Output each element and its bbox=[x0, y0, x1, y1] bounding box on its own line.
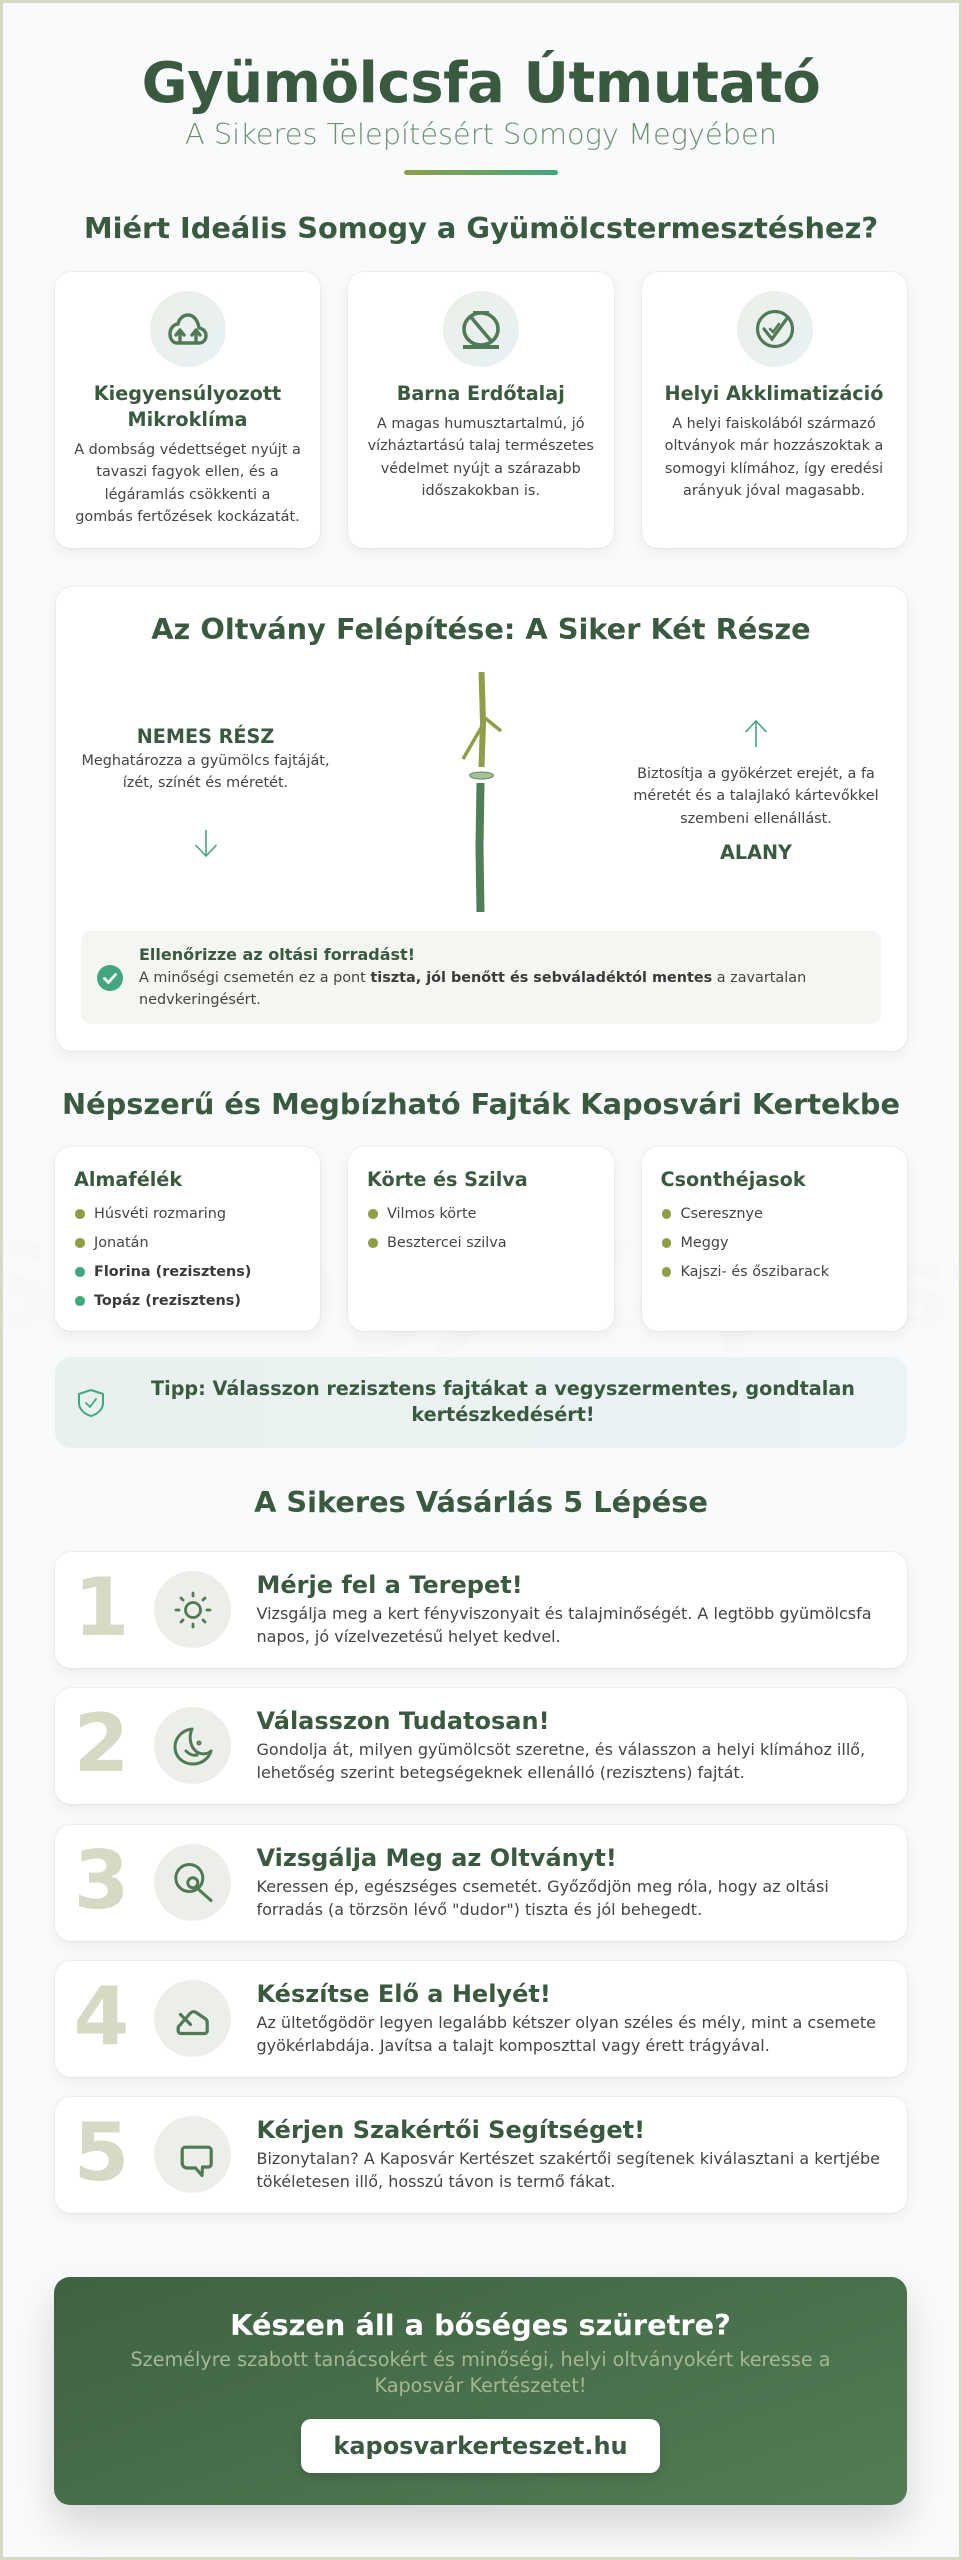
step text: Az ültetőgödör legyen legalább kétszer olyan széles és mély, mint a csemete bbox=[256, 2013, 876, 2032]
step text bbox=[256, 1604, 872, 1646]
panel: microclimate bbox=[55, 272, 320, 548]
panel: pears and plums bbox=[348, 1147, 614, 1331]
card text: oltványok már hozzászoktak a bbox=[665, 438, 883, 454]
step number: 3 bbox=[74, 1834, 129, 1927]
card text: A magas humusztartalmú, jó bbox=[377, 416, 585, 432]
step number: 1 bbox=[74, 1561, 129, 1654]
card text: tavaszi fagyok ellen, és a bbox=[96, 464, 279, 480]
list item: Húsvéti rozmaring bbox=[94, 1206, 226, 1222]
step title: Vizsgálja Meg az Oltványt! bbox=[256, 1844, 617, 1872]
step title: Válasszon Tudatosan! bbox=[256, 1707, 550, 1735]
panel: apples bbox=[55, 1147, 320, 1331]
card text: A helyi faiskolából származó bbox=[672, 416, 876, 432]
step number: 5 bbox=[74, 2106, 129, 2199]
arrow: up bbox=[745, 720, 767, 747]
card heading: Mikroklíma bbox=[128, 408, 247, 431]
list item: Topáz (rezisztens) bbox=[94, 1293, 241, 1309]
card heading bbox=[94, 382, 281, 431]
card text bbox=[368, 416, 594, 499]
cta button bbox=[301, 2419, 660, 2473]
callout text bbox=[139, 970, 806, 1008]
card text: somogyi klímához, így eredési bbox=[665, 461, 883, 477]
list item: Kajszi- és őszibarack bbox=[680, 1264, 829, 1280]
callout: check graft bbox=[81, 931, 881, 1024]
panel: graft anatomy bbox=[56, 587, 906, 1051]
arrow: down bbox=[195, 830, 217, 857]
panel heading: Az Oltvány Felépítése: A Siker Két Része bbox=[151, 612, 811, 646]
card heading: Helyi Akklimatizáció bbox=[665, 382, 883, 405]
step title: Készítse Elő a Helyét! bbox=[256, 1980, 551, 2008]
cta heading: Készen áll a bőséges szüretre? bbox=[230, 2308, 731, 2342]
step text bbox=[256, 2013, 876, 2055]
icon: planting hole bbox=[154, 1980, 231, 2057]
card heading: Kiegyensúlyozott bbox=[94, 382, 281, 405]
card text: időszakokban is. bbox=[422, 483, 540, 499]
icon: double check ring bbox=[736, 291, 812, 367]
step 4 bbox=[55, 1961, 907, 2077]
callout: tip bbox=[55, 1357, 907, 1448]
step 5 bbox=[55, 2097, 907, 2213]
cta text bbox=[130, 2348, 830, 2397]
rootstock text: Biztosítja a gyökérzet erejét, a fa bbox=[637, 766, 875, 782]
callout text: A minőségi csemetén ez a pont tiszta, jól benőtt és sebváladéktól mentes a zavartalan bbox=[139, 970, 806, 986]
cta button: kaposvarkerteszet.hu bbox=[333, 2432, 628, 2460]
scion text bbox=[81, 753, 330, 791]
tip text bbox=[151, 1377, 855, 1426]
icon: shield check bbox=[78, 1389, 104, 1417]
scion text: ízét, színét és méretét. bbox=[123, 775, 288, 791]
rootstock text: méretét és a talajlakó kártevőkkel bbox=[633, 788, 879, 804]
title divider bbox=[404, 170, 558, 175]
tip text: kertészkedésért! bbox=[411, 1403, 595, 1426]
graft union bbox=[469, 772, 493, 779]
callout heading: Ellenőrizze az oltási forradást! bbox=[139, 945, 415, 964]
step 3 bbox=[55, 1825, 907, 1941]
step text: Bizonytalan? A Kaposvár Kertészet szakértői segítenek kiválasztani a kertjébe bbox=[256, 2149, 880, 2168]
step text: Gondolja át, milyen gyümölcsöt szeretne, és válasszon a helyi klímához illő, bbox=[256, 1740, 865, 1759]
card text: vízháztartású talaj természetes bbox=[368, 438, 594, 454]
title: Gyümölcsfa Útmutató bbox=[142, 51, 820, 116]
step text: lehetőség szerint betegségeknek ellenálló (rezisztens) fajtát. bbox=[256, 1763, 745, 1782]
card heading: Barna Erdőtalaj bbox=[397, 382, 565, 405]
cta text: Kaposvár Kertészetet! bbox=[374, 2374, 587, 2397]
list item: Florina (rezisztens) bbox=[94, 1264, 251, 1280]
list heading: Csonthéjasok bbox=[660, 1168, 806, 1190]
list item: Vilmos körte bbox=[387, 1206, 476, 1222]
icon: sun bbox=[154, 1571, 231, 1648]
panel: call to action bbox=[54, 2277, 907, 2505]
step text bbox=[256, 2149, 880, 2191]
step title: Kérjen Szakértői Segítséget! bbox=[256, 2116, 645, 2144]
rootstock bbox=[479, 783, 480, 912]
card text: gombás fertőzések kockázatát. bbox=[75, 509, 300, 525]
graft illustration bbox=[462, 672, 502, 912]
icon: cloud with arrows bbox=[150, 291, 226, 367]
callout text: nedvkeringésért. bbox=[139, 992, 261, 1008]
card text: arányuk jóval magasabb. bbox=[683, 483, 865, 499]
heading: five steps: A Sikeres Vásárlás 5 Lépése bbox=[254, 1485, 708, 1519]
icon: check badge bbox=[97, 965, 123, 991]
card text: védelmet nyújt a szárazabb bbox=[381, 461, 581, 477]
step text: forradás (a törzsön lévő "dudor") tiszta és jól behegedt. bbox=[256, 1900, 702, 1919]
step text: tökéletesen illő, hosszú távon is termő fákat. bbox=[256, 2172, 615, 2191]
step text: gyökérlabdája. Javítsa a talajt komposzttal vagy érett trágyával. bbox=[256, 2036, 770, 2055]
panel: brown forest soil bbox=[348, 272, 614, 548]
cta text: Személyre szabott tanácsokért és minőségi, helyi oltványokért keresse a bbox=[130, 2348, 830, 2371]
heading: why Somogy: Miért Ideális Somogy a Gyümölcstermesztéshez? bbox=[84, 211, 878, 245]
list item: Jonatán bbox=[94, 1235, 149, 1251]
panel: stone fruits bbox=[642, 1147, 906, 1331]
step text: napos, jó vízelvezetésű helyet kedvel. bbox=[256, 1627, 561, 1646]
tip text: Tipp: Válasszon rezisztens fajtákat a vegyszermentes, gondtalan bbox=[151, 1377, 855, 1400]
list heading: Körte és Szilva bbox=[367, 1168, 528, 1190]
panel: local acclimatization bbox=[642, 272, 906, 548]
icon: magnifier bbox=[154, 1844, 231, 1921]
scion heading: NEMES RÉSZ bbox=[137, 724, 274, 748]
step 1 bbox=[55, 1552, 907, 1668]
card text bbox=[665, 416, 883, 499]
rootstock heading: ALANY bbox=[720, 840, 792, 864]
icon: moon bbox=[154, 1707, 231, 1784]
card text: légáramlás csökkenti a bbox=[105, 487, 270, 503]
card text: A dombság védettséget nyújt a bbox=[74, 442, 301, 458]
step text: Vizsgálja meg a kert fényviszonyait és talajminőségét. A legtöbb gyümölcsfa bbox=[256, 1604, 872, 1623]
scion bbox=[462, 672, 500, 767]
step text bbox=[256, 1877, 829, 1919]
card text bbox=[74, 442, 301, 525]
list item: Cseresznye bbox=[680, 1206, 763, 1222]
step 2 bbox=[55, 1688, 907, 1804]
step text bbox=[256, 1740, 865, 1782]
list item: Meggy bbox=[680, 1235, 729, 1251]
rootstock text: szembeni ellenállást. bbox=[680, 811, 832, 827]
scion text: Meghatározza a gyümölcs fajtáját, bbox=[81, 753, 330, 769]
list item: Besztercei szilva bbox=[387, 1235, 507, 1251]
step number: 2 bbox=[74, 1697, 129, 1790]
step text: Keressen ép, egészséges csemetét. Győződjön meg róla, hogy az oltási bbox=[256, 1877, 829, 1896]
rootstock text bbox=[633, 766, 879, 827]
icon: speech bubble bbox=[154, 2116, 231, 2193]
list heading: Almafélék bbox=[74, 1168, 182, 1190]
step number: 4 bbox=[74, 1970, 129, 2063]
heading: varieties: Népszerű és Megbízható Fajták Kaposvári Kertekbe bbox=[62, 1087, 900, 1121]
icon: soil ring bbox=[443, 291, 519, 367]
step title: Mérje fel a Terepet! bbox=[256, 1571, 523, 1599]
subtitle: A Sikeres Telepítésért Somogy Megyében bbox=[185, 117, 777, 151]
